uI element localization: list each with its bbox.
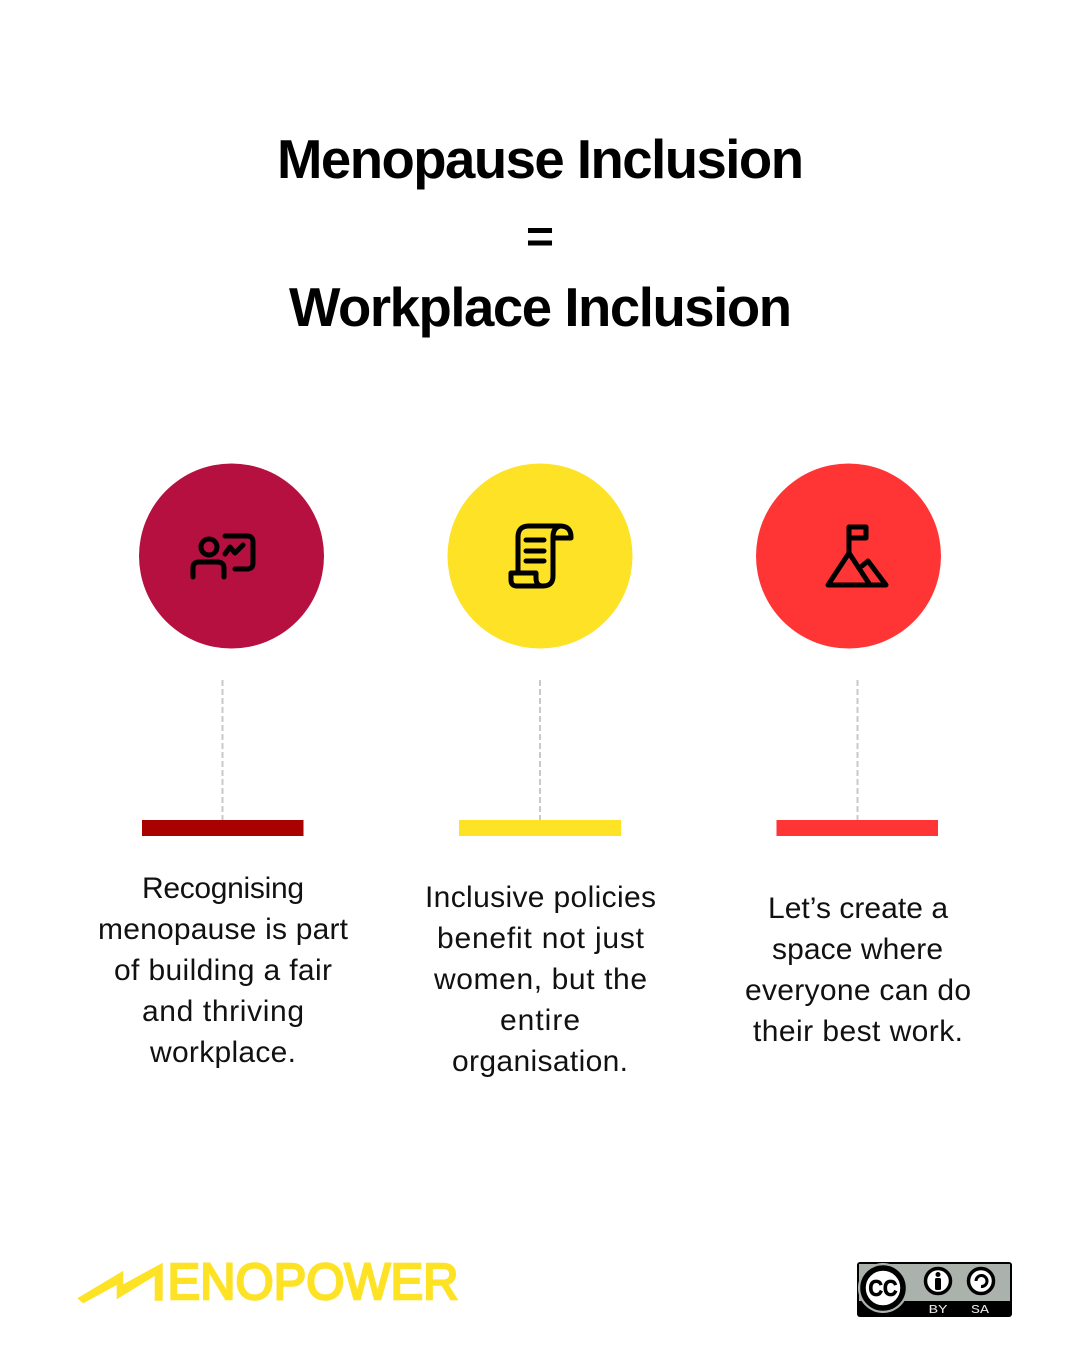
text block: entire	[500, 1004, 580, 1037]
title: Workplace Inclusion	[289, 277, 792, 338]
panel: inclusive policies	[425, 464, 656, 1078]
badge: Creative Commons BY-SA	[857, 1262, 1012, 1317]
text block: Inclusive policies	[425, 881, 656, 914]
text block	[425, 881, 656, 1078]
text block: Recognising	[142, 872, 304, 905]
panel: recognising menopause	[98, 464, 349, 1069]
icon: scroll	[448, 464, 632, 648]
title: =	[526, 210, 554, 262]
text block: Let’s create a	[768, 892, 948, 925]
text block	[98, 872, 349, 1069]
text block: workplace.	[149, 1036, 296, 1069]
icon: presenter with chart	[139, 464, 324, 648]
text block: organisation.	[452, 1045, 628, 1078]
text block: women, but the	[433, 963, 647, 996]
text block: and thriving	[142, 995, 304, 1028]
badge: Creative Commons BY-SA: BY	[928, 1303, 948, 1317]
panel: create a space	[745, 464, 971, 1048]
badge: Creative Commons BY-SA: SA	[971, 1303, 990, 1317]
title: Menopause Inclusion	[277, 129, 804, 190]
accent bar	[776, 820, 938, 836]
text block: their best work.	[753, 1015, 963, 1048]
connector line	[856, 680, 858, 820]
title	[277, 129, 804, 338]
text block: menopause is part	[98, 913, 349, 946]
badge: Creative Commons BY-SA: CC	[868, 1275, 898, 1301]
connector line	[539, 680, 541, 820]
accent bar	[459, 820, 621, 836]
accent bar	[142, 820, 304, 836]
text block	[745, 892, 971, 1048]
logo: Menopower: ENOPOWER	[168, 1253, 458, 1310]
text block: everyone can do	[745, 974, 971, 1007]
icon: mountain with flag	[756, 464, 941, 648]
text block: benefit not just	[437, 922, 645, 955]
text block: space where	[772, 933, 943, 966]
text block: of building a fair	[114, 954, 332, 987]
connector line	[222, 680, 224, 820]
